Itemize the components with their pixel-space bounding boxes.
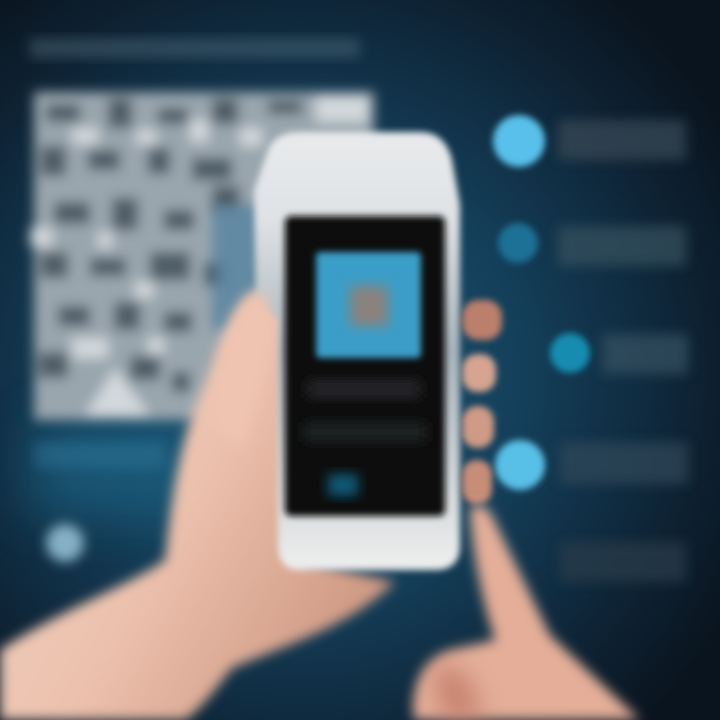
screen subtext xyxy=(304,422,426,442)
scan caption bottom left xyxy=(35,442,165,468)
screen button xyxy=(328,474,358,496)
pointing finger xyxy=(413,505,640,720)
heading bar xyxy=(30,38,360,58)
feature icon 2 xyxy=(498,223,538,263)
finger 1 xyxy=(462,300,502,340)
phone screen xyxy=(285,216,445,516)
feature text 5 xyxy=(560,542,686,582)
feature text 2 xyxy=(558,226,686,266)
feature text 3 xyxy=(602,334,688,374)
phone xyxy=(254,132,460,570)
finger 4 xyxy=(462,460,492,504)
qr tile on screen xyxy=(316,252,421,358)
feature icon 3 xyxy=(550,333,590,373)
screen text xyxy=(308,380,420,398)
scan icon bottom left xyxy=(46,524,84,562)
qr tile center xyxy=(350,286,388,326)
finger shadow xyxy=(432,667,482,720)
feature icon 1 xyxy=(493,115,545,167)
teal glow under qr xyxy=(30,425,200,515)
feature text 4 xyxy=(560,442,688,484)
hand holding phone xyxy=(0,290,395,720)
finger 3 xyxy=(462,406,494,448)
finger 2 xyxy=(462,354,496,392)
fingers on right of phone xyxy=(462,300,502,504)
thumb xyxy=(208,292,270,450)
qr fade at right xyxy=(212,205,267,330)
phone body xyxy=(254,132,460,570)
right feature list xyxy=(493,115,688,582)
feature icon 4 xyxy=(495,440,545,490)
feature text 1 xyxy=(558,120,686,160)
qr code panel xyxy=(30,92,374,420)
